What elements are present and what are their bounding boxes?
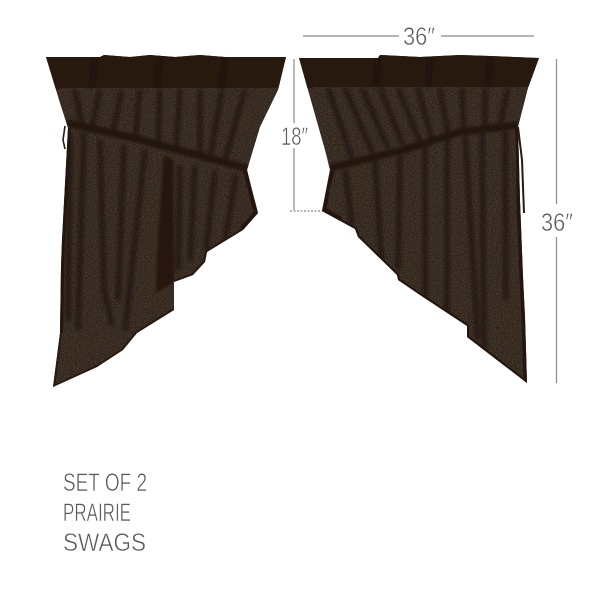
right swag tie cord	[330, 125, 518, 168]
right swag fold shadows	[328, 88, 508, 350]
drop dimension: 18 inches: 18″	[281, 123, 308, 151]
left swag tie cord	[67, 123, 250, 169]
right swag lower edge hem	[322, 211, 527, 383]
left swag fold shadows	[68, 90, 245, 330]
infographic canvas	[46, 27, 572, 551]
width dimension: 36 inches: 36″	[403, 23, 435, 51]
left swag header band	[44, 54, 288, 90]
product description text: SWAGS	[63, 529, 146, 557]
product description text: SET OF 2	[63, 469, 147, 497]
right swag tie string	[518, 127, 524, 213]
left curtain swag	[40, 50, 290, 390]
product description text: PRAIRIE	[63, 499, 131, 527]
length dimension: 36 inches: 36″	[541, 209, 573, 237]
right swag header band	[297, 54, 541, 89]
left swag lower edge hem	[53, 213, 258, 387]
left swag dark inner flap	[156, 155, 174, 293]
right curtain swag	[295, 50, 545, 390]
product description text	[63, 469, 147, 557]
left swag tie string	[63, 126, 65, 149]
